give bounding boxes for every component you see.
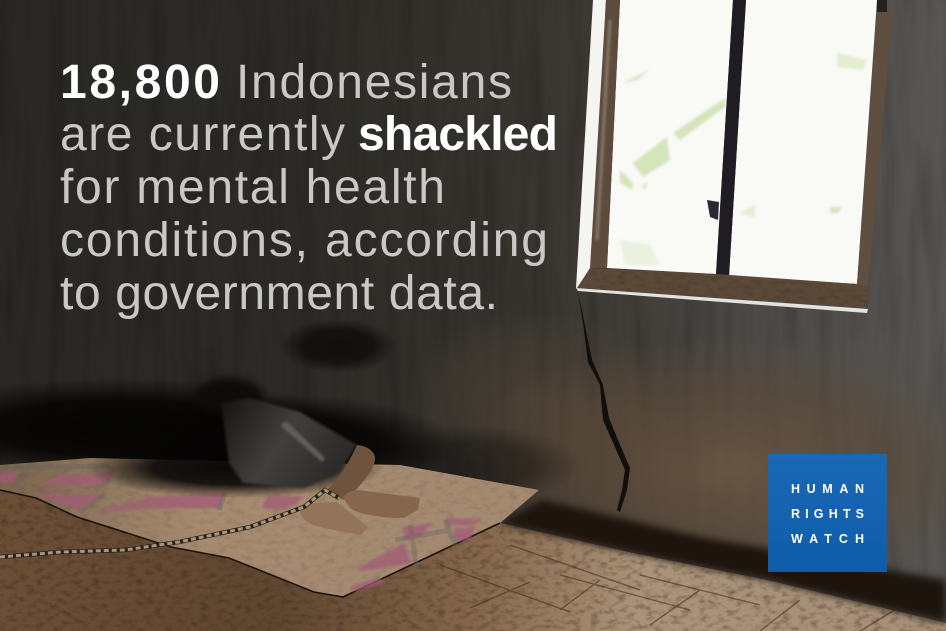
shackled figure: [195, 378, 420, 535]
sill highlight: [576, 288, 868, 313]
logo: Human Rights Watch: [768, 454, 887, 572]
chain: [0, 490, 339, 557]
floor: [0, 486, 946, 631]
left frame: [590, 0, 620, 268]
line 3: for mental health: [60, 161, 445, 214]
window sill: [577, 268, 868, 308]
line 1: 18,800: [60, 56, 220, 109]
pink stripes: [0, 472, 482, 592]
mat shadow edge: [0, 490, 500, 597]
line 1: Indonesians: [236, 56, 512, 109]
head: [195, 378, 263, 414]
foliage through window: [620, 53, 867, 265]
wall crack: [578, 291, 630, 512]
line 5: to government data.: [60, 267, 498, 320]
window: [576, 0, 893, 313]
brick lines: [440, 545, 895, 631]
silhouette in window: [707, 200, 719, 220]
left pane: [607, 0, 733, 274]
headline: [60, 56, 558, 320]
line 2: shackled: [358, 108, 558, 161]
mat: [0, 458, 539, 597]
wall smudge: [280, 319, 396, 373]
shadow behind figure: [85, 438, 385, 498]
line 4: conditions, according: [60, 214, 548, 267]
right pane: [729, 0, 877, 284]
wall base shadow: [500, 500, 946, 623]
window reveal: [576, 0, 606, 288]
logo line 1: HUMAN: [791, 482, 864, 496]
line 2: are currently: [60, 108, 345, 161]
upper foot: [343, 490, 420, 518]
lower foot: [300, 502, 368, 535]
logo line 2: RIGHTS: [791, 507, 864, 521]
shirt: [221, 398, 357, 488]
logo line 3: WATCH: [791, 532, 864, 546]
right frame: [857, 0, 893, 287]
line 1: [60, 56, 512, 109]
grey stripes: [0, 466, 455, 568]
leg: [327, 445, 375, 500]
mullion: [716, 0, 746, 276]
line 2: [60, 108, 558, 161]
